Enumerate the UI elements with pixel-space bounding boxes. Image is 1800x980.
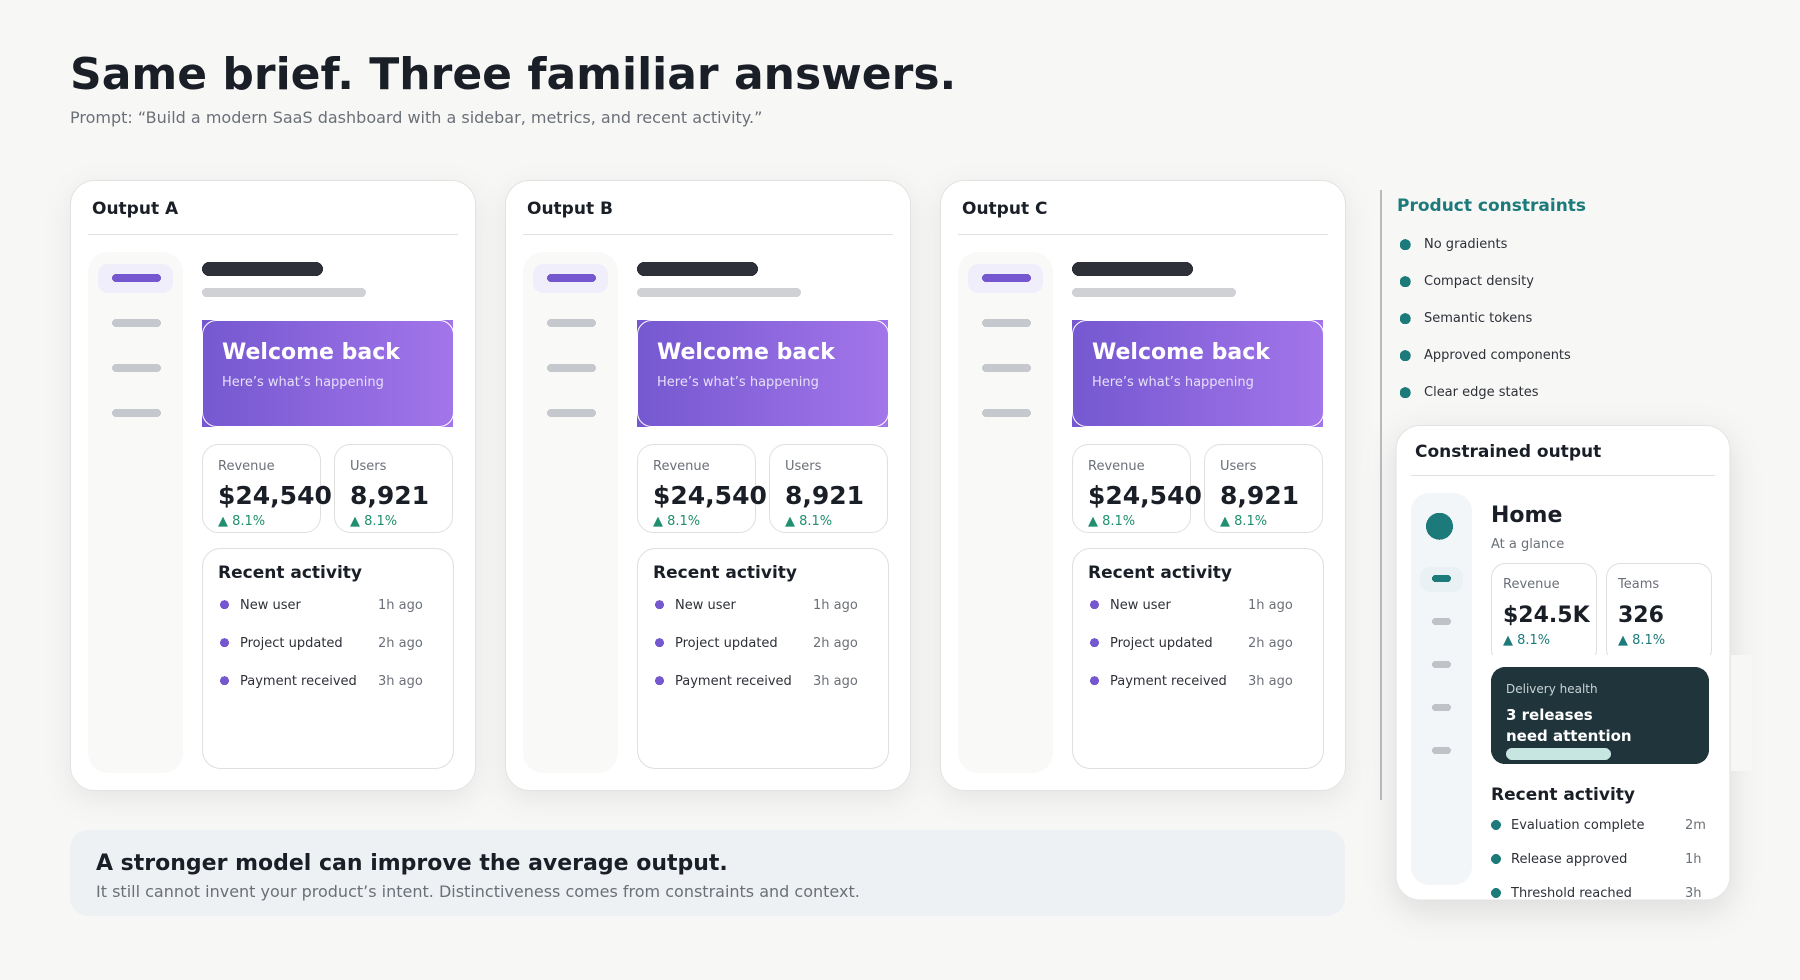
metric: revenue: Revenue [1503,577,1560,592]
panel: output C [940,180,1346,790]
metric: users: ▲ 8.1% [1220,514,1267,529]
card heading: Output A [92,199,179,219]
card heading: Output B [527,199,613,219]
takeaway band [70,830,1345,916]
metric: revenue: $24,540 [218,481,332,510]
recent activity [1491,785,1706,901]
metric: revenue: ▲ 8.1% [653,514,700,529]
metric: revenue: $24,540 [1088,481,1202,510]
metric: revenue: Revenue [218,459,275,474]
sidebar [88,252,183,773]
recent activity: 3h [1685,886,1702,901]
metric: teams: ▲ 8.1% [1618,633,1665,648]
panel: product constraints: No gradients [1424,237,1508,252]
takeaway band: A stronger model can improve the average output. [96,851,728,876]
recent activity: 3h ago [813,674,858,689]
metric: revenue: $24,540 [653,481,767,510]
recent activity [638,548,888,768]
recent activity: 1h [1685,852,1702,867]
sidebar [1411,493,1472,885]
delivery health card: 3 releases [1506,706,1593,724]
header placeholders [637,262,801,297]
panel: output B [506,180,910,790]
recent activity: 3h ago [1248,674,1293,689]
metric: revenue: Revenue [653,459,710,474]
sidebar [958,252,1053,773]
recent activity: Project updated [675,636,778,651]
recent activity: Release approved [1511,852,1627,867]
metric: users: 8,921 [785,481,864,510]
metric: teams [1606,564,1712,664]
recent activity: Project updated [240,636,343,651]
hero banner: Here’s what’s happening [1092,375,1254,390]
metric: revenue [1072,444,1202,532]
hero banner: Welcome back [1092,340,1271,365]
recent activity: Evaluation complete [1511,818,1644,833]
card heading: Constrained output [1415,442,1601,462]
metric: revenue [638,444,767,532]
recent activity: Recent activity [1491,785,1635,805]
title: Same brief. Three familiar answers. [70,49,956,100]
header placeholders [202,262,366,297]
recent activity: Project updated [1110,636,1213,651]
metric: users: Users [1220,459,1257,474]
recent activity: 2h ago [813,636,858,651]
metric: revenue: ▲ 8.1% [1088,514,1135,529]
hero banner [637,320,888,427]
panel: constrained output [1396,426,1752,901]
delivery health card: need attention [1506,727,1632,745]
recent activity: Payment received [675,674,792,689]
header placeholders [1072,262,1236,297]
panel: output A [70,180,476,790]
metric: revenue: ▲ 8.1% [1503,633,1550,648]
recent activity: New user [240,598,301,613]
recent activity: 1h ago [1248,598,1293,613]
metric: users: ▲ 8.1% [350,514,397,529]
recent activity: 2h ago [378,636,423,651]
page heading [1491,503,1564,552]
metric: revenue [202,444,332,532]
prompt subtitle: Prompt: “Build a modern SaaS dashboard with a sidebar, metrics, and recent activity.” [70,108,762,127]
hero banner: Welcome back [657,340,836,365]
hero banner [202,320,454,427]
divider rule [1380,190,1382,800]
recent activity: 3h ago [378,674,423,689]
metric: revenue: $24.5K [1503,603,1591,628]
recent activity: Payment received [1110,674,1227,689]
takeaway band: It still cannot invent your product’s intent. Distinctiveness comes from constraints and context. [96,882,860,901]
delivery health card: Delivery health [1506,682,1598,696]
metric: revenue: Revenue [1088,459,1145,474]
recent activity: 1h ago [378,598,423,613]
panel: product constraints: Compact density [1424,274,1534,289]
metric: users: ▲ 8.1% [785,514,832,529]
delivery health card [1491,667,1709,764]
metric: revenue: ▲ 8.1% [218,514,265,529]
panel: product constraints [1397,196,1586,400]
recent activity: Recent activity [218,563,362,583]
recent activity: New user [1110,598,1171,613]
sidebar [523,252,618,773]
hero banner [1072,320,1324,427]
recent activity [1072,548,1324,768]
recent activity: 2h ago [1248,636,1293,651]
panel: product constraints: Approved components [1424,348,1571,363]
page heading: At a glance [1491,537,1564,552]
hero banner: Here’s what’s happening [657,375,819,390]
metric: users: 8,921 [350,481,429,510]
metric: users [770,444,888,532]
recent activity: 1h ago [813,598,858,613]
metric: users: 8,921 [1220,481,1299,510]
recent activity: New user [675,598,736,613]
metric: users [334,444,452,532]
metric: users [1204,444,1322,532]
recent activity: Recent activity [653,563,797,583]
recent activity: 2m [1685,818,1706,833]
recent activity: Threshold reached [1510,886,1632,901]
panel: product constraints: Product constraints [1397,196,1586,216]
page heading: Home [1491,503,1562,528]
hero banner: Welcome back [222,340,401,365]
panel: product constraints: Semantic tokens [1424,311,1532,326]
recent activity: Payment received [240,674,357,689]
recent activity [202,548,454,768]
hero banner: Here’s what’s happening [222,375,384,390]
metric: users: Users [350,459,387,474]
recent activity: Recent activity [1088,563,1232,583]
panel: product constraints: Clear edge states [1424,385,1539,400]
card heading: Output C [962,199,1047,219]
metric: users: Users [785,459,822,474]
metric: teams: Teams [1617,577,1659,592]
metric: revenue [1492,564,1596,664]
metric: teams: 326 [1618,603,1664,628]
